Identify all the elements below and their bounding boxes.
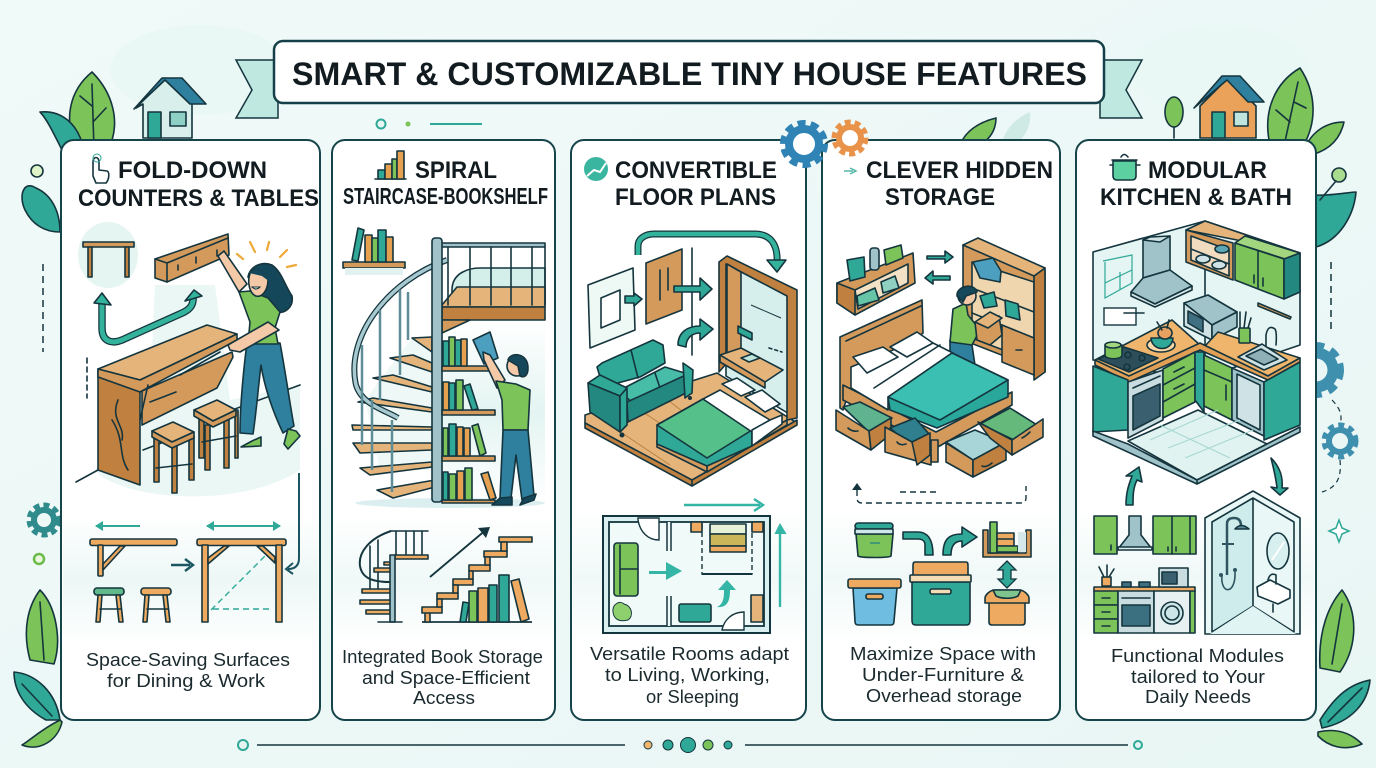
caption: or Sleeping	[646, 686, 739, 707]
fold-down counter	[76, 325, 237, 485]
wall plan sketch	[1103, 255, 1144, 325]
isometric kitchen	[1093, 221, 1300, 484]
bottom kitchen module	[1094, 516, 1196, 633]
spiral staircase	[352, 238, 545, 502]
person: storing box	[950, 286, 1002, 372]
range hood	[1131, 236, 1192, 307]
panel: fold-down counters and tables	[61, 140, 320, 720]
caption: Versatile Rooms adapt	[590, 643, 789, 664]
left house	[43, 78, 206, 352]
title: SMART & CUSTOMIZABLE TINY HOUSE FEATURES	[292, 56, 1087, 92]
heading: clever hidden: STORAGE	[885, 184, 995, 211]
panel: convertible floor plans	[571, 140, 806, 720]
right side gears	[1292, 346, 1356, 542]
caption: for Dining & Work	[107, 670, 266, 691]
bed with drawers	[840, 300, 1012, 462]
right top leaves	[1268, 68, 1356, 332]
icon: small table	[78, 222, 138, 288]
wall art frame	[588, 268, 642, 348]
caption	[1111, 645, 1284, 707]
stools	[143, 385, 300, 493]
sofa	[588, 340, 693, 438]
bed	[657, 378, 787, 472]
heading: fold-down: FOLD-DOWN	[118, 157, 267, 184]
left top leaves	[22, 72, 115, 232]
lower cabinets	[1093, 352, 1300, 440]
caption	[590, 643, 789, 707]
caption	[850, 643, 1036, 706]
heading: modular	[1100, 157, 1292, 211]
heading: modular: MODULAR	[1148, 157, 1267, 184]
arrows	[1126, 458, 1288, 505]
caption: Overhead storage	[866, 685, 1022, 706]
icon: bar chart	[375, 151, 406, 179]
panel: clever hidden storage	[822, 140, 1060, 720]
small spiral stair and stairs diagram	[360, 527, 532, 622]
person: man reaching for book	[473, 332, 536, 505]
bottom left leaves	[14, 590, 62, 747]
upper cabinets	[1186, 221, 1300, 299]
icon: pointing hand	[93, 154, 109, 183]
bottom bath module	[1205, 491, 1300, 634]
right house	[1165, 76, 1264, 138]
arrows between shelf and case	[925, 251, 953, 284]
cooktop and pot	[1098, 320, 1175, 372]
staircase books	[442, 337, 496, 503]
left side gear and dots	[29, 505, 59, 564]
caption: and Space-Efficient	[362, 667, 530, 688]
arrow: top conversion arrow	[638, 234, 786, 272]
wall bookshelf	[343, 228, 405, 275]
heading: spiral: SPIRAL	[415, 157, 497, 184]
caption: Space-Saving Surfaces	[86, 649, 290, 670]
dashed arrows	[852, 483, 1026, 503]
heading: convertible	[615, 157, 777, 211]
heading: convertible: FLOOR PLANS	[615, 184, 776, 211]
person: woman adjusting shelf	[218, 242, 300, 449]
icon: pot	[1110, 154, 1140, 180]
floor plan diagram	[603, 499, 786, 633]
arrow: fold motion	[94, 290, 202, 342]
caption: Daily Needs	[1145, 686, 1251, 707]
bookcase	[963, 238, 1045, 380]
arrows	[674, 278, 713, 347]
heading: clever hidden: CLEVER HIDDEN	[866, 157, 1053, 184]
caption: Maximize Space with	[850, 643, 1036, 664]
door panel	[646, 249, 682, 324]
drawers	[836, 402, 1043, 477]
microwave	[1184, 295, 1237, 340]
caption: Integrated Book Storage	[342, 646, 543, 667]
heading: fold-down	[78, 157, 319, 212]
panel: modular kitchen and bath	[1076, 140, 1316, 720]
panel: spiral staircase-bookshelf	[332, 140, 555, 720]
footer decoration	[238, 738, 1142, 752]
icon: convert badge	[584, 157, 608, 181]
icon: small arrow	[844, 168, 856, 174]
top center decorations	[376, 112, 1030, 150]
bottom diagram: folded and unfolded table	[90, 473, 299, 622]
floor platform	[585, 373, 797, 486]
gears icon	[783, 122, 866, 165]
title banner	[236, 41, 1142, 118]
storage containers diagram	[848, 522, 1031, 625]
heading: spiral	[343, 157, 548, 209]
wall bed frame	[719, 256, 797, 420]
heading: clever hidden	[866, 157, 1053, 211]
faucet, sink and jar	[1238, 303, 1291, 370]
heading: fold-down: COUNTERS & TABLES	[78, 185, 319, 212]
caption	[342, 646, 543, 708]
caption: Access	[413, 687, 475, 708]
heading: spiral: STAIRCASE-BOOKSHELF	[343, 183, 548, 209]
kitchen floor	[1093, 410, 1300, 484]
caption: to Living, Working,	[605, 664, 770, 685]
caption: Functional Modules	[1111, 645, 1284, 666]
heading: convertible: CONVERTIBLE	[615, 157, 777, 184]
caption: tailored to Your	[1131, 666, 1265, 687]
bottom right leaves	[1318, 590, 1370, 748]
overhead shelf	[837, 245, 915, 315]
caption: Under-Furniture &	[862, 664, 1025, 685]
heading: modular: KITCHEN & BATH	[1100, 184, 1292, 211]
caption	[86, 649, 290, 691]
countertop	[1095, 320, 1300, 382]
wall shelf	[155, 234, 229, 282]
